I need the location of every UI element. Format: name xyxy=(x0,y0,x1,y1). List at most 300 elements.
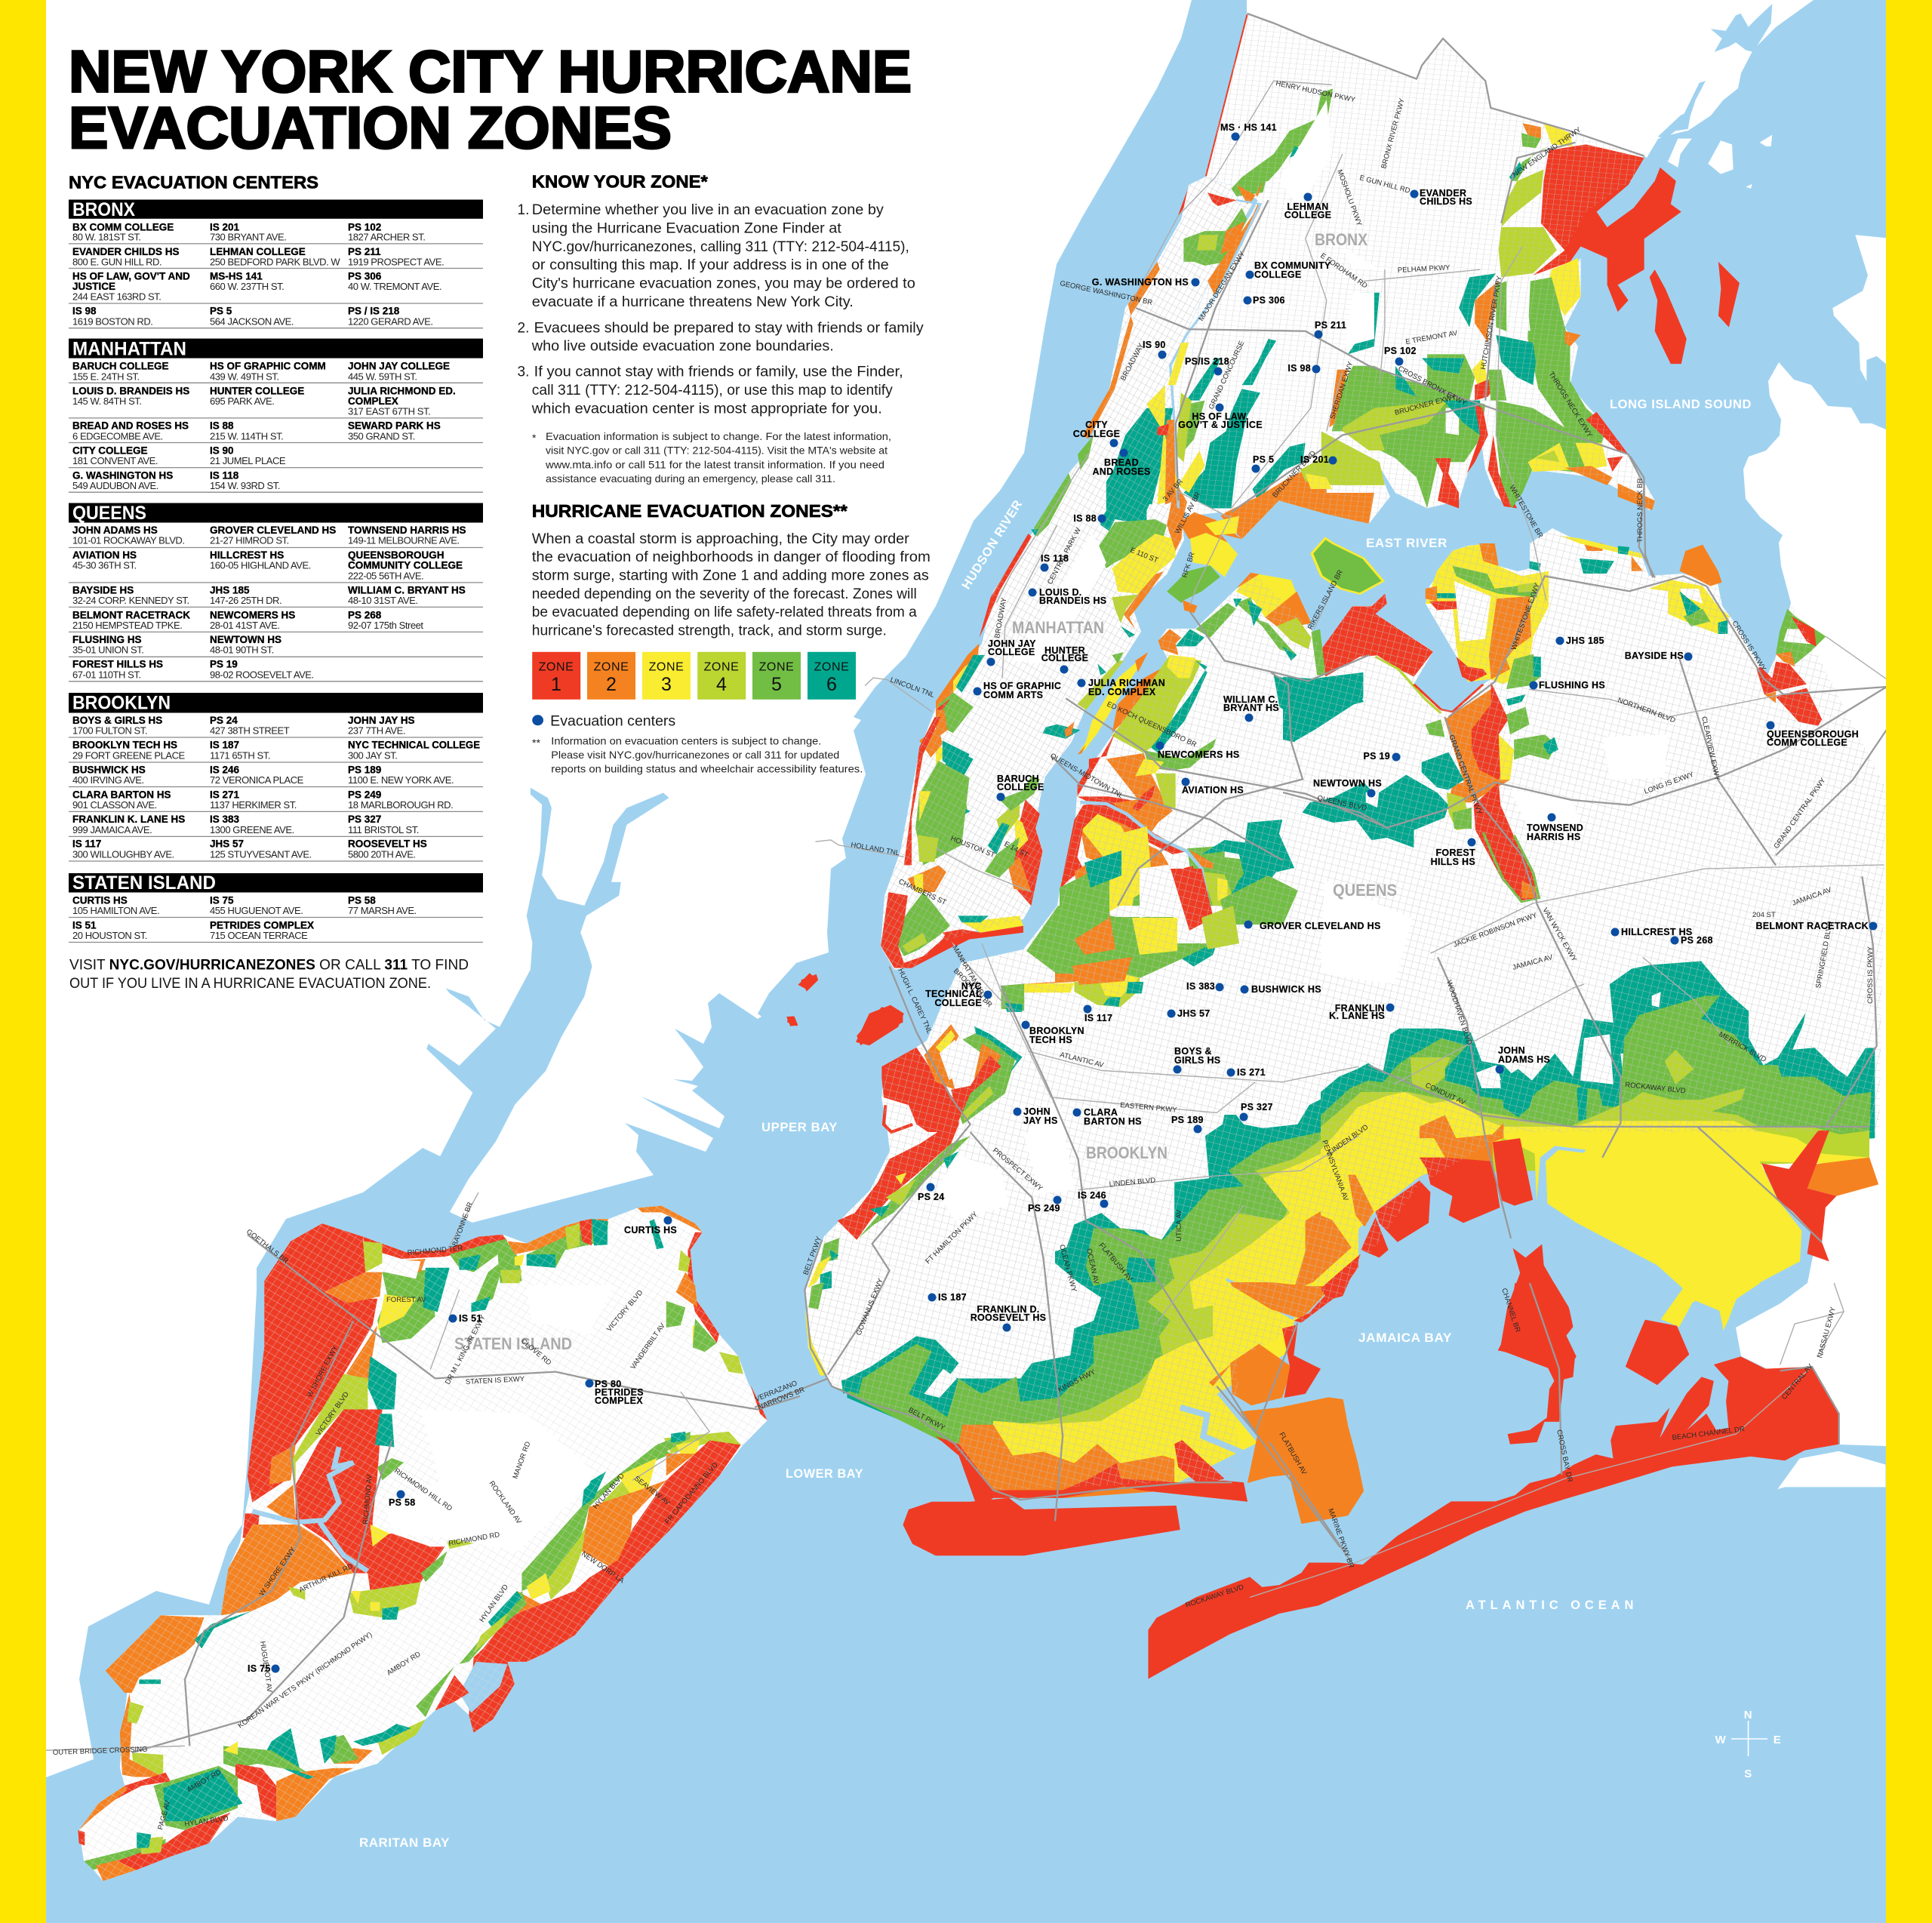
evacuation center markers and labels: COMM ARTS xyxy=(983,690,1043,700)
evacuation center markers and labels: PS/IS 218 xyxy=(1185,356,1229,367)
legend swatch: zone 1: ZONE xyxy=(539,661,574,674)
road labels: VICTORY BLVD xyxy=(314,1390,351,1438)
table: Manhattan centers: BARUCH COLLEGE xyxy=(72,360,169,371)
evacuation center markers and labels: JOHN xyxy=(1498,1045,1525,1056)
highways: Bronx xyxy=(1131,14,1655,601)
legend swatch: zone 2 xyxy=(587,652,635,700)
table: Staten Island centers: PS 58 xyxy=(348,895,376,906)
road labels: ATLANTIC AV xyxy=(1059,1051,1105,1069)
table: Bronx centers: PS / IS 218 xyxy=(348,306,400,317)
table: Manhattan centers: 549 AUDUBON AVE. xyxy=(72,480,158,491)
evacuation center markers and labels: LEHMAN xyxy=(1287,202,1329,212)
evacuation center markers and labels: COLLEGE xyxy=(1073,429,1120,439)
road labels: LINDEN BLVD xyxy=(1109,1177,1156,1189)
evacuation center markers and labels: HS OF LAW, xyxy=(1192,411,1249,422)
table: Queens centers: 48-10 31ST AVE. xyxy=(348,595,418,606)
evacuation center markers and labels: COLLEGE xyxy=(997,782,1044,792)
water labels: LOWER BAY xyxy=(786,1467,863,1481)
legend: evacuation centers dot: Evacuation centers xyxy=(550,714,675,730)
table: Staten Island centers: 715 OCEAN TERRACE xyxy=(210,930,308,941)
table: Queens centers: AVIATION HS xyxy=(72,549,137,561)
road labels: THROGS NECK BR xyxy=(1636,478,1644,543)
road labels: ROCKAWAY BLVD xyxy=(1185,1583,1245,1610)
evacuation center markers and labels: JHS 185 xyxy=(1566,635,1604,646)
table: Queens centers: 98-02 ROOSEVELT AVE. xyxy=(210,669,314,681)
road labels: PROSPECT EXWY xyxy=(991,1146,1044,1193)
panel: Queens south belt zones xyxy=(1321,961,1878,1381)
water labels: UPPER BAY xyxy=(761,1121,838,1134)
highways: Jamaica Bay and Rockaways xyxy=(1250,1283,1844,1597)
road labels: MOSHOLU PKWY xyxy=(1335,168,1364,228)
header: Bronx: BRONX xyxy=(72,199,135,220)
borough labels: QUEENS xyxy=(1333,881,1397,900)
evacuation center markers and labels: PS 5 xyxy=(1253,454,1274,465)
legend swatch: zone 1 xyxy=(532,652,580,700)
table: Queens centers: 160-05 HIGHLAND AVE. xyxy=(210,560,311,571)
table: Brooklyn centers: 72 VERONICA PLACE xyxy=(210,774,304,786)
evacuation center markers and labels: AND ROSES xyxy=(1092,466,1151,477)
evacuation center markers and labels: JOHN xyxy=(1023,1106,1051,1117)
title: EVACUATION ZONES xyxy=(69,94,672,161)
road labels: LONG IS EXWY xyxy=(1643,771,1696,796)
road labels: GOETHALS BR xyxy=(245,1228,290,1266)
evacuation center markers and labels: PS 189 xyxy=(1171,1115,1204,1125)
table: Bronx centers: 1619 BOSTON RD. xyxy=(72,316,152,328)
panel: Bronx zones xyxy=(1078,14,1740,539)
table: Bronx centers: 564 JACKSON AVE. xyxy=(210,316,294,328)
table: Queens centers: 149-11 MELBOURNE AVE. xyxy=(348,535,460,546)
road labels: OCEAN AV xyxy=(1084,1248,1100,1285)
evacuation center markers and labels: IS 187 xyxy=(938,1292,967,1303)
road labels: UTICA AV xyxy=(1175,1209,1183,1241)
table: Bronx centers: JUSTICE xyxy=(72,281,115,292)
text block: know your zone steps: 1. xyxy=(518,202,529,218)
evacuation center markers and labels: ROOSEVELT HS xyxy=(971,1312,1046,1323)
highways: Brooklyn xyxy=(755,943,1358,1547)
evacuation center markers and labels: COLLEGE xyxy=(1041,653,1088,663)
table: Manhattan centers: BREAD AND ROSES HS xyxy=(72,420,189,432)
evacuation center markers and labels: COMPLEX xyxy=(595,1395,643,1406)
table: Brooklyn centers: 427 38TH STREET xyxy=(210,725,290,737)
road labels: FOREST AV xyxy=(386,1296,426,1304)
road labels: RICHMOND AV xyxy=(361,1474,374,1525)
heading: know your zone: KNOW YOUR ZONE* xyxy=(532,172,708,192)
road labels: KOREAN WAR VETS PKWY (RICHMOND PKWY) xyxy=(236,1631,374,1730)
legend swatch: zone 1: 1 xyxy=(551,674,561,695)
road labels: BROADWAY xyxy=(993,596,1009,639)
road labels: HYLAN BLVD xyxy=(592,1472,626,1511)
road labels: MANHATTAN BR xyxy=(950,944,986,996)
table: Queens centers: BAYSIDE HS xyxy=(72,585,134,596)
table: Manhattan centers: IS 90 xyxy=(210,445,234,457)
table: Queens centers: PS 19 xyxy=(210,659,238,670)
heading: hurricane evacuation zones: HURRICANE EVACUATION ZONES** xyxy=(532,501,848,521)
road labels: QUEENS BLVD xyxy=(1316,794,1367,813)
legend swatch: zone 4 xyxy=(697,652,746,700)
road labels: NARROWS BR xyxy=(757,1386,806,1412)
table: Manhattan centers: 6 EDGECOMBE AVE. xyxy=(72,430,163,442)
road labels: VERRAZANO xyxy=(754,1379,798,1404)
text block: know your zone steps: Evacuees should be prepared to stay with friends or family xyxy=(534,320,924,336)
evacuation center markers and labels: NEWCOMERS HS xyxy=(1158,749,1239,760)
borough labels: BROOKLYN xyxy=(1086,1143,1168,1162)
table: Queens centers: COMMUNITY COLLEGE xyxy=(348,560,463,571)
text block: know your zone steps: using the Hurricane Evacuation Zone Finder at xyxy=(532,220,842,237)
road labels: WHITESTONE EXWY xyxy=(1509,582,1542,651)
road labels: CROSS BAY DR xyxy=(1555,1429,1574,1483)
evacuation center markers and labels: IS 271 xyxy=(1237,1067,1266,1078)
road labels: MANOR RD xyxy=(511,1441,533,1480)
road labels: SHERIDAN EXWY xyxy=(1328,360,1355,420)
table: Bronx centers: 80 W. 181ST ST. xyxy=(72,231,141,242)
table: Queens centers: PS 268 xyxy=(348,610,382,621)
table: Manhattan centers: CITY COLLEGE xyxy=(72,445,148,457)
evacuation center markers and labels: PS 249 xyxy=(1028,1203,1060,1214)
road labels: JAMAICA AV xyxy=(1791,886,1833,908)
road labels: PENNSYLVANIA AV xyxy=(1320,1139,1350,1203)
border: yellow right bar xyxy=(1886,0,1932,1923)
table: Brooklyn centers: IS 246 xyxy=(210,764,240,775)
text block: know your zone steps: 3. xyxy=(518,364,529,380)
road labels: BELT PKWY xyxy=(801,1235,823,1276)
table: Manhattan centers: 145 W. 84TH ST. xyxy=(72,395,142,407)
evacuation center markers and labels: IS 383 xyxy=(1186,981,1215,992)
table: Brooklyn centers: 300 JAY ST. xyxy=(348,750,397,762)
legend swatch: zone 5: ZONE xyxy=(759,661,794,674)
table: Bronx centers: 250 BEDFORD PARK BLVD. W xyxy=(210,256,340,267)
panel: Jamaica Bay and Rockaway zones xyxy=(1148,1283,1839,1679)
text block: know your zone steps xyxy=(518,202,924,417)
table: Queens centers: JOHN ADAMS HS xyxy=(72,525,158,536)
road labels: JACKIE ROBINSON PKWY xyxy=(1452,911,1539,949)
footnote: evacuation information xyxy=(532,430,891,485)
evacuation center markers and labels xyxy=(248,122,1878,1674)
table: Brooklyn centers: 237 7TH AVE. xyxy=(348,725,405,737)
table: Queens centers: 67-01 110TH ST. xyxy=(72,669,141,681)
table: Brooklyn centers: PS 24 xyxy=(210,715,238,726)
road labels: RICHMOND HILL RD xyxy=(392,1466,454,1513)
table: Queens centers: 35-01 UNION ST. xyxy=(72,645,143,656)
road labels: E TREMONT AV xyxy=(1405,329,1459,346)
evacuation center markers and labels: GROVER CLEVELAND HS xyxy=(1260,921,1381,931)
header: Staten Island xyxy=(69,872,483,894)
header: Manhattan: MANHATTAN xyxy=(72,339,186,360)
table: Queens centers: 48-01 90TH ST. xyxy=(210,645,274,656)
evacuation center markers and labels: IS 98 xyxy=(1287,363,1311,374)
evacuation center markers and labels: ED. COMPLEX xyxy=(1088,687,1156,697)
road labels: CROSS IS PKWY xyxy=(1730,620,1767,673)
table: Staten Island centers: PETRIDES COMPLEX xyxy=(210,919,314,931)
water labels xyxy=(359,398,1752,1850)
footnote: centers information: Please visit NYC.gov/hurricanezones or call 311 for updated xyxy=(551,749,839,761)
road labels: E 110 ST xyxy=(1129,546,1159,565)
road labels: SEAVIEW AV xyxy=(632,1475,672,1508)
text block: evacuation zones description xyxy=(532,531,931,638)
footnote: centers information: Information on evacuation centers is subject to change. xyxy=(551,735,821,747)
table: Manhattan centers: COMPLEX xyxy=(348,395,398,407)
water labels: LONG ISLAND SOUND xyxy=(1610,398,1752,411)
text block: know your zone steps: which evacuation center is most appropriate for you. xyxy=(531,402,882,417)
table: Queens centers: WILLIAM C. BRYANT HS xyxy=(348,585,466,596)
table: Manhattan centers: G. WASHINGTON HS xyxy=(72,469,173,481)
road labels: FLATBUSH AV xyxy=(1277,1431,1309,1477)
table: Brooklyn centers: 901 CLASSON AVE. xyxy=(72,799,157,811)
road labels: MERRICK BLVD xyxy=(1718,1030,1767,1064)
evacuation center markers and labels: IS 75 xyxy=(248,1663,271,1674)
evacuation center markers and labels: FOREST xyxy=(1435,848,1475,858)
evacuation center markers and labels: PS 24 xyxy=(918,1192,945,1202)
table: Staten Island centers: CURTIS HS xyxy=(72,895,128,906)
table: Bronx centers: 1919 PROSPECT AVE. xyxy=(348,256,444,267)
evacuation center markers and labels: CITY xyxy=(1085,420,1108,430)
road labels: GRAND CONCOURSE xyxy=(1208,340,1246,411)
road labels: CHAMBERS ST xyxy=(897,878,948,907)
borough labels: MANHATTAN xyxy=(1012,618,1104,637)
legend swatch: zone 4: ZONE xyxy=(704,661,739,674)
table: Manhattan centers: 445 W. 59TH ST. xyxy=(348,371,417,382)
text block: evacuation zones description: the evacuation of neighborhoods in danger of flooding from xyxy=(532,549,931,565)
land: Westchester xyxy=(1247,0,1814,158)
text block: evacuation zones description: needed depending on the severity of the forecast. Zones will xyxy=(532,586,917,602)
legend swatch: zone 3 xyxy=(642,652,691,700)
land: Queens, Brooklyn and Nassau xyxy=(804,362,1886,1456)
road labels: BAYONNE BR xyxy=(451,1201,475,1248)
evacuation center markers and labels: TOWNSEND xyxy=(1527,823,1583,833)
title xyxy=(69,38,912,161)
legend swatch: zone 2: 2 xyxy=(606,674,617,695)
table: Queens centers: TOWNSEND HARRIS HS xyxy=(348,525,466,536)
table: Bronx centers xyxy=(69,221,483,328)
road labels: ARTHUR KILL RD xyxy=(298,1562,355,1595)
table: Manhattan centers: 317 EAST 67TH ST. xyxy=(348,405,430,417)
panel: Brooklyn south belt zones xyxy=(787,974,1358,1555)
evacuation center markers and labels: JULIA RICHMAN xyxy=(1088,678,1165,688)
road labels: FT HAMILTON PKWY xyxy=(924,1210,980,1266)
table: Queens centers: FOREST HILLS HS xyxy=(72,659,163,670)
road labels: FR CAPODANNO BLVD xyxy=(663,1461,720,1526)
parks and open land xyxy=(387,100,1668,1551)
panel: Queens centers xyxy=(69,503,483,682)
evacuation center markers and labels: LOUIS D. xyxy=(1039,587,1082,598)
evacuation center markers and labels: ADAMS HS xyxy=(1498,1054,1550,1065)
text block: know your zone steps: NYC.gov/hurricanezones, calling 311 (TTY: 212-504-4115), xyxy=(532,239,909,255)
road labels: HOLLAND TNL xyxy=(850,841,900,857)
table: Brooklyn centers: IS 117 xyxy=(72,838,101,850)
evacuation center markers and labels: BOYS & xyxy=(1174,1046,1212,1057)
table: Queens centers: 2150 HEMPSTEAD TPKE. xyxy=(72,620,182,631)
road labels: HUGUENOT AV xyxy=(258,1641,274,1694)
road labels: FLATBUSH AV xyxy=(1097,1241,1134,1284)
road labels: OCEAN PKWY xyxy=(1057,1244,1078,1294)
evacuation center markers and labels: IS 51 xyxy=(459,1313,482,1324)
evacuation center markers and labels: BAYSIDE HS xyxy=(1625,651,1684,661)
legend swatch: zone 5 xyxy=(752,652,801,700)
table: Brooklyn centers: BROOKLYN TECH HS xyxy=(72,740,177,751)
evacuation center markers and labels: HS OF GRAPHIC xyxy=(983,681,1061,691)
land: Bronx xyxy=(1171,14,1655,539)
road labels: RICHMOND RD xyxy=(448,1531,500,1548)
evacuation center markers and labels: BX COMMUNITY xyxy=(1254,260,1331,271)
icon: compass xyxy=(1715,1709,1781,1780)
road labels: NORTHERN BLVD xyxy=(1617,696,1676,725)
table: Brooklyn centers: BUSHWICK HS xyxy=(72,764,146,775)
evacuation center markers and labels: FRANKLIN xyxy=(1335,1003,1385,1014)
table: Bronx centers: PS 5 xyxy=(210,306,232,317)
road labels: MARINE PKWY BR xyxy=(1326,1507,1355,1569)
table: Brooklyn centers: IS 383 xyxy=(210,814,240,825)
evacuation center markers and labels: PS 80 xyxy=(595,1379,622,1389)
table: Brooklyn centers: ROOSEVELT HS xyxy=(348,838,427,850)
evacuation center markers and labels: FLUSHING HS xyxy=(1539,680,1605,691)
table: Queens centers: 92-07 175th Street xyxy=(348,620,423,631)
evacuation center markers and labels: PS 58 xyxy=(389,1497,416,1508)
road labels: HYLAN BLVD xyxy=(478,1583,510,1624)
header: Staten Island: STATEN ISLAND xyxy=(72,872,216,894)
text block: know your zone steps: who live outside evacuation zone boundaries. xyxy=(531,339,834,355)
road labels: HUTCHINSON RIVER PKWY xyxy=(1479,275,1504,371)
table: Brooklyn centers: IS 271 xyxy=(210,789,240,801)
callout: visit website: OUT IF YOU LIVE IN A HURRICANE EVACUATION ZONE. xyxy=(69,975,431,992)
table: Manhattan centers: SEWARD PARK HS xyxy=(348,420,441,432)
table: Queens centers: 28-01 41ST AVE. xyxy=(210,620,280,631)
water labels: HUDSON RIVER xyxy=(959,497,1025,592)
table: Brooklyn centers: CLARA BARTON HS xyxy=(72,789,171,801)
evacuation center markers and labels: PS 268 xyxy=(1681,935,1713,946)
table: Manhattan centers: IS 88 xyxy=(210,420,234,432)
evacuation center markers and labels: PS 102 xyxy=(1384,346,1417,356)
table: Brooklyn centers: 1137 HERKIMER ST. xyxy=(210,799,297,811)
table: Manhattan centers: LOUIS D. BRANDEIS HS xyxy=(72,385,189,396)
evacuation center markers and labels: BARUCH xyxy=(997,774,1039,784)
road labels: RFK BR xyxy=(1180,551,1197,579)
table: Queens centers: 21-27 HIMROD ST. xyxy=(210,535,289,546)
icon: compass: N xyxy=(1744,1709,1752,1721)
text block: know your zone steps: or consulting this map. If your address is in one of the xyxy=(532,257,889,273)
table: Staten Island centers xyxy=(69,895,483,942)
road labels: KINGS HWY xyxy=(1057,1368,1097,1395)
road labels: GRAND CENTRAL PKWY xyxy=(1772,776,1828,851)
evacuation center markers and labels: EVANDER xyxy=(1420,188,1466,198)
table: Brooklyn centers: 300 WILLOUGHBY AVE. xyxy=(72,849,174,860)
evacuation center markers and labels: HARRIS HS xyxy=(1527,832,1580,842)
table: Bronx centers: PS 306 xyxy=(348,271,382,282)
table: Queens centers: NEWCOMERS HS xyxy=(210,610,295,621)
table: Bronx centers: 1827 ARCHER ST. xyxy=(348,231,425,242)
text block: know your zone steps: Determine whether you live in an evacuation zone by xyxy=(532,202,884,218)
evacuation center markers and labels: MS · HS 141 xyxy=(1220,122,1277,133)
evacuation center markers and labels: K. LANE HS xyxy=(1329,1011,1385,1021)
evacuation center markers and labels: IS 201 xyxy=(1300,454,1329,465)
road labels: HUGH L. CAREY TNL xyxy=(896,968,934,1035)
evacuation center markers and labels: TECHNICAL xyxy=(925,989,982,999)
road labels: EASTERN PKWY xyxy=(1120,1101,1178,1115)
evacuation center markers and labels: PS 306 xyxy=(1253,295,1285,306)
road labels: BROOKLYN BR xyxy=(952,967,994,1009)
evacuation center markers and labels: GIRLS HS xyxy=(1174,1055,1220,1066)
table: Staten Island centers: 20 HOUSTON ST. xyxy=(72,930,147,941)
footnote: centers information: reports on building status and wheelchair accessibility features. xyxy=(551,763,863,775)
legend swatch: zone 5: 5 xyxy=(771,674,782,695)
legend swatch: zone 6 xyxy=(808,652,856,700)
evacuation center markers and labels: WILLIAM C. xyxy=(1223,694,1278,705)
legend swatch: zone 6: ZONE xyxy=(814,661,849,674)
road labels: CENTRAL PARK W xyxy=(1046,527,1083,586)
legend swatch: zone 6: 6 xyxy=(826,674,837,695)
road labels: OUTER BRIDGE CROSSING xyxy=(53,1746,148,1757)
text block: know your zone steps: City's hurricane evacuation zones, you may be ordered to xyxy=(532,276,915,291)
footnote: evacuation information: * xyxy=(532,432,537,444)
evacuation center markers and labels: JHS 57 xyxy=(1177,1008,1211,1019)
table: Manhattan centers: JOHN JAY COLLEGE xyxy=(348,360,450,371)
road labels: CLEARVIEW EXWY xyxy=(1700,715,1721,782)
evacuation center markers and labels: BELMONT RACETRACK xyxy=(1755,921,1869,931)
evacuation center markers and labels: TECH HS xyxy=(1029,1035,1072,1045)
icon: compass: E xyxy=(1774,1734,1781,1746)
table: Brooklyn centers: FRANKLIN K. LANE HS xyxy=(72,814,185,825)
evacuation center markers and labels: NYC xyxy=(961,981,982,992)
road labels: CLOVE RD xyxy=(519,1337,552,1368)
road labels: PELHAM PKWY xyxy=(1398,263,1451,275)
footnote: centers information: ** xyxy=(532,737,540,749)
road labels: GEORGE WASHINGTON BR xyxy=(1059,279,1153,307)
land: New Jersey xyxy=(46,0,1192,1777)
borough labels: STATEN ISLAND xyxy=(454,1334,572,1353)
water: Newark Bay xyxy=(426,788,669,1212)
road labels: THROGS NECK EXWY xyxy=(1546,371,1594,439)
table: Bronx centers: 1220 GERARD AVE. xyxy=(348,316,433,328)
table: Queens centers: GROVER CLEVELAND HS xyxy=(210,525,336,536)
road labels: DR M L KING JR EXWY xyxy=(444,1313,488,1386)
table: Queens centers: 147-26 25TH DR. xyxy=(210,595,281,606)
road labels: CENTRAL AV xyxy=(1780,1362,1815,1401)
evacuation center markers and labels: JOHN JAY xyxy=(988,638,1036,649)
table: Brooklyn centers: JOHN JAY HS xyxy=(348,715,415,726)
panel: western Queens and Williamsburg zones xyxy=(1060,522,1363,906)
land: Long Beach xyxy=(1777,1451,1886,1489)
highways: Queens south xyxy=(1368,865,1884,1242)
text block: evacuation zones description: be evacuated depending on life safety-related threats from a xyxy=(532,605,917,620)
heading: NYC evacuation centers: NYC EVACUATION CENTERS xyxy=(69,172,318,192)
road labels: NEW ENGLAND THRWY xyxy=(1511,125,1583,179)
water labels: ATLANTIC OCEAN xyxy=(1466,1598,1634,1612)
road labels: AMBOY RD xyxy=(386,1650,423,1678)
table: Bronx centers: 730 BRYANT AVE. xyxy=(210,231,286,242)
table: Brooklyn centers: IS 187 xyxy=(210,740,239,751)
footnote: evacuation information: Evacuation information is subject to change. For the latest information, xyxy=(546,430,891,442)
evacuation center markers and labels: IS 246 xyxy=(1078,1190,1106,1201)
panel: Brooklyn waterfront zones xyxy=(804,943,1217,1394)
bridge: Throgs Neck xyxy=(1630,457,1653,577)
table: Manhattan centers: 350 GRAND ST. xyxy=(348,430,415,442)
table: Manhattan centers: 439 W. 49TH ST. xyxy=(210,371,279,382)
road labels: NASSAU EXWY xyxy=(1816,1306,1838,1359)
road labels: W SHORE EXWY xyxy=(306,1344,340,1398)
evacuation center markers and labels: CURTIS HS xyxy=(624,1225,677,1235)
table: Brooklyn centers: NYC TECHNICAL COLLEGE xyxy=(348,740,480,751)
panel: Bronx centers xyxy=(69,199,483,328)
table: Manhattan centers: 154 W. 93RD ST. xyxy=(210,480,280,491)
table: Staten Island centers: IS 51 xyxy=(72,919,97,931)
table: Bronx centers: IS 201 xyxy=(210,221,240,232)
footnote: centers information xyxy=(532,735,863,775)
text block: evacuation zones description: storm surge, starting with Zone 1 and adding more zones as xyxy=(532,568,929,584)
table: Manhattan centers: 695 PARK AVE. xyxy=(210,395,274,407)
evacuation center markers and labels: BROOKLYN xyxy=(1029,1026,1084,1036)
road labels: QUEENS-MIDTOWN TNL xyxy=(1049,752,1124,801)
table: Manhattan centers: HUNTER COLLEGE xyxy=(210,385,304,396)
panel: Brooklyn centers xyxy=(69,693,483,861)
table: Queens centers: HILLCREST HS xyxy=(210,549,284,561)
